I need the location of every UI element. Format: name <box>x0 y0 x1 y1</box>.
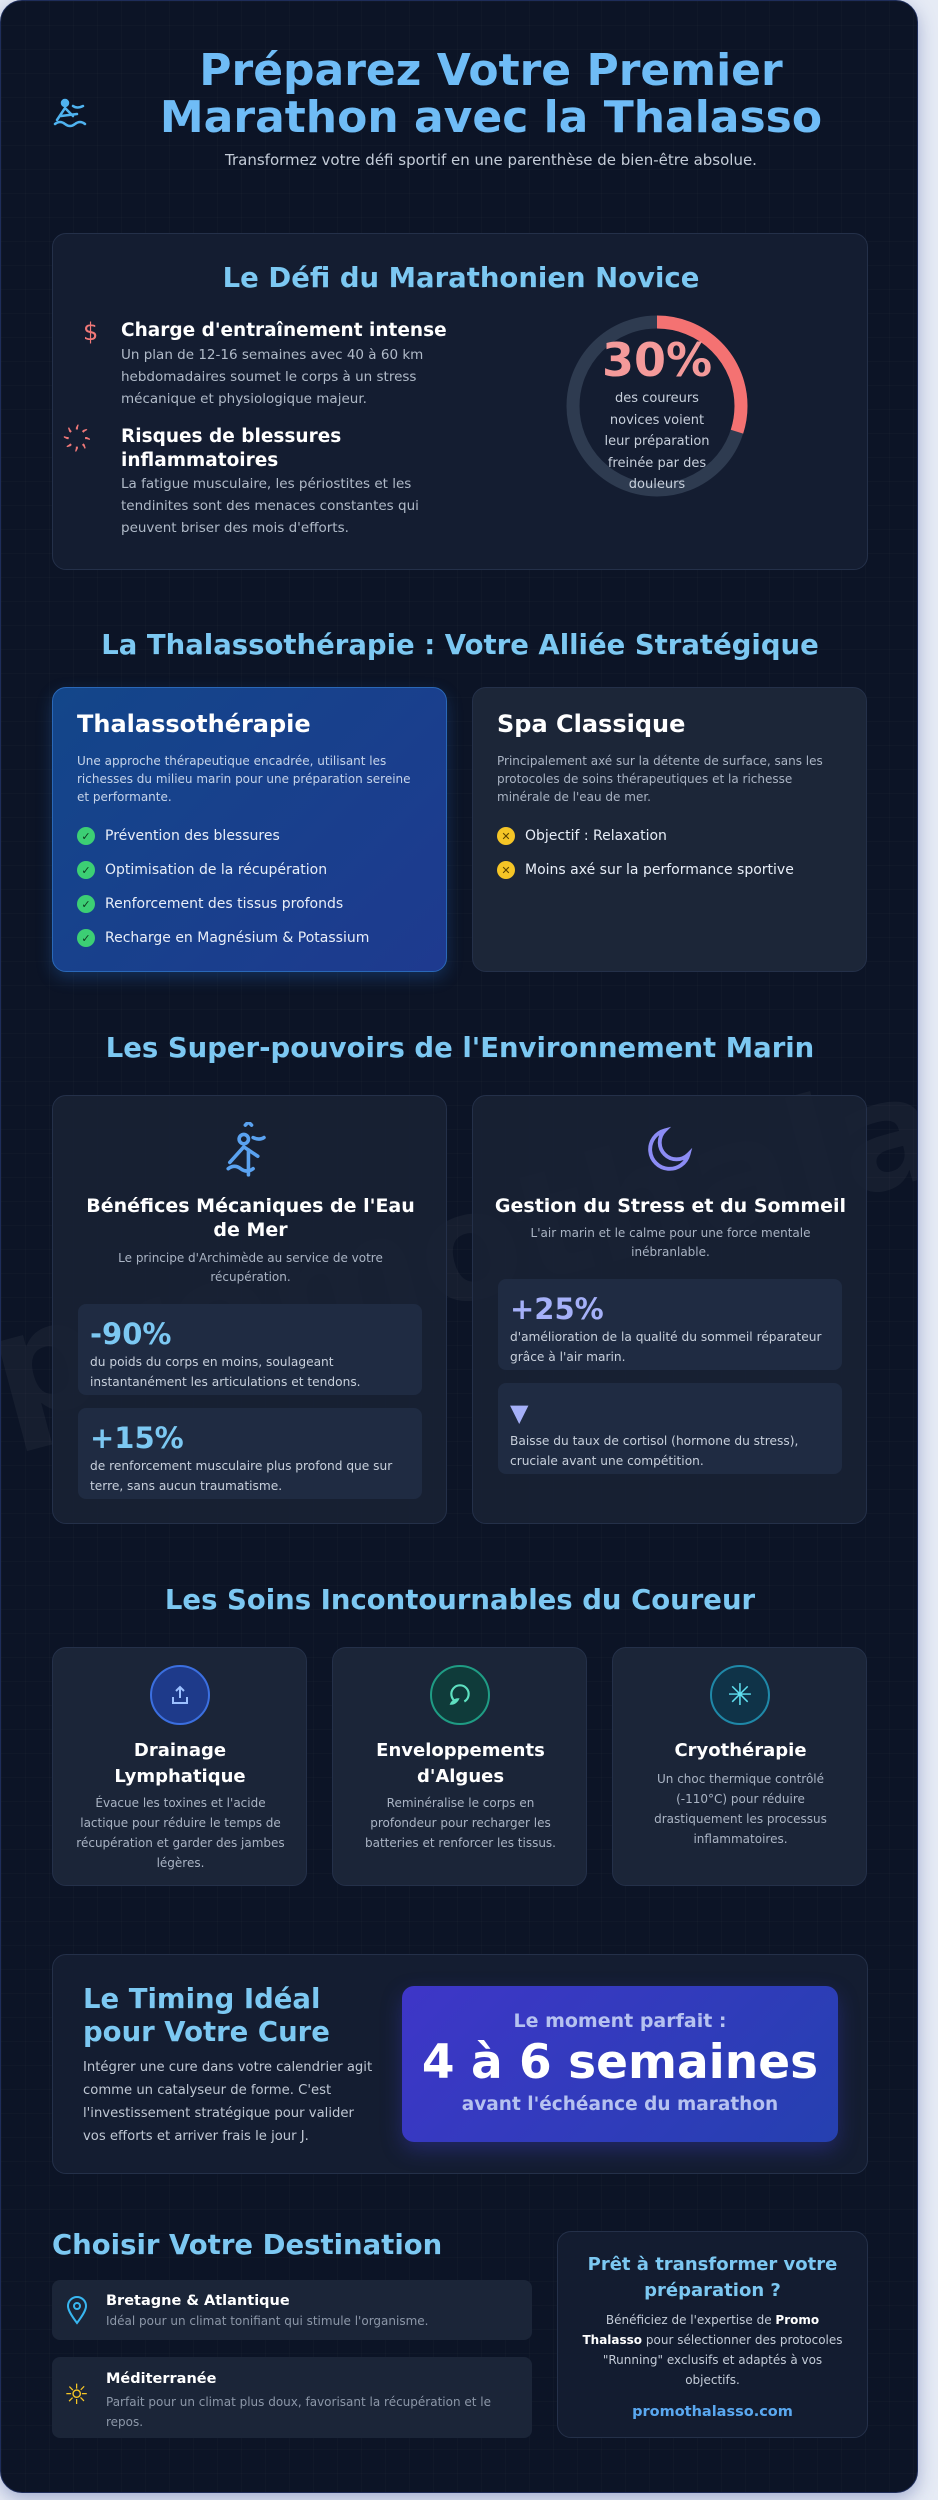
panel: stress: Gestion du Stress et du Sommeil <box>495 1195 846 1217</box>
panel: CTA <box>557 2231 868 2438</box>
checklist: ✓ <box>81 932 91 944</box>
x-list: ✕ <box>501 864 511 876</box>
item: risques: La fatigue musculaire, les périostites et les tendinites sont des menaces constantes qui peuvent briser des mois d'efforts. <box>121 476 419 536</box>
panel: timing: Le Timing Idéal pour Votre Cure <box>83 1983 330 2048</box>
item: risques: ҉ <box>83 427 91 451</box>
item: bretagne <box>52 2280 532 2340</box>
stat -90%: du poids du corps en moins, soulageant instantanément les articulations et tendons. <box>90 1355 361 1389</box>
item: charge: Charge d'entraînement intense <box>121 320 447 341</box>
stat -90%: -90% <box>90 1317 171 1351</box>
item: méditerranée: ☼ <box>64 2378 89 2411</box>
icon: upload <box>150 1665 210 1725</box>
stat +25%: +25% <box>510 1292 604 1326</box>
stat -90% <box>78 1304 422 1395</box>
icon: swimmer <box>226 1122 266 1177</box>
checklist: ✓ <box>81 864 91 876</box>
callout: 4 à 6 semaines: Le moment parfait : <box>513 2010 727 2032</box>
checklist: Recharge en Magnésium & Potassium <box>105 930 369 946</box>
checklist: ✓ <box>81 830 91 842</box>
panel: thalasso: Thalassothérapie <box>77 710 311 738</box>
panel: spa <box>472 687 867 972</box>
checklist: Prévention des blessures <box>105 828 280 844</box>
stat cortisol <box>498 1383 842 1474</box>
title: Marathon avec la Thalasso <box>160 92 822 143</box>
checklist <box>77 827 369 947</box>
panel: mécaniques <box>52 1095 447 1524</box>
item: méditerranée <box>52 2357 532 2438</box>
title: Préparez Votre Premier <box>199 45 783 96</box>
x-list <box>497 827 794 879</box>
item: risques: Risques de blessures inflammatoires <box>121 426 341 471</box>
callout: 4 à 6 semaines <box>402 1986 838 2142</box>
callout: 4 à 6 semaines: avant l'échéance du marathon <box>462 2094 778 2115</box>
heading: alliée: La Thalassothérapie : Votre Alliée Stratégique <box>101 629 819 661</box>
card: algues: Enveloppements d'Algues <box>376 1740 545 1787</box>
stat cortisol: ▼ <box>510 1399 528 1427</box>
panel: thalasso: Une approche thérapeutique encadrée, utilisant les richesses du milieu marin pour une préparation sereine et performante. <box>77 754 411 804</box>
card: drainage: Drainage Lymphatique <box>114 1740 246 1787</box>
x-list: Moins axé sur la performance sportive <box>525 862 794 878</box>
item: charge <box>83 318 447 407</box>
title <box>160 45 822 143</box>
item: charge: Un plan de 12-16 semaines avec 40 à 60 km hebdomadaires soumet le corps à un stress mécanique et physiologique majeur. <box>121 347 423 407</box>
panel: mécaniques: Bénéfices Mécaniques de l'Eau de Mer <box>86 1195 415 1241</box>
card: cryo: Cryothérapie <box>674 1740 807 1761</box>
item: risques <box>64 424 419 536</box>
item: méditerranée: Parfait pour un climat plus doux, favorisant la récupération et le repos. <box>106 2395 491 2429</box>
icon: snowflake: ✳ <box>727 1678 753 1712</box>
card: algues: Reminéralise le corps en profondeur pour recharger les batteries et renforcer les tissus. <box>365 1796 556 1850</box>
panel: spa: Principalement axé sur la détente de surface, sans les protocoles de soins thérapeutiques et la richesse minérale de l'eau de mer. <box>497 754 823 804</box>
x-list: Objectif : Relaxation <box>525 828 667 844</box>
panel: CTA: Prêt à transformer votre <box>588 2254 837 2275</box>
icon: snowflake <box>710 1665 770 1725</box>
donut chart 30%: 30% <box>602 333 712 387</box>
icon: moon <box>648 1126 692 1171</box>
panel: timing <box>52 1954 868 2174</box>
donut chart 30% <box>566 316 748 496</box>
heading: destination: Choisir Votre Destination <box>52 2229 442 2261</box>
icon: swimmer <box>54 98 86 128</box>
panel: CTA: promothalasso.com <box>632 2404 793 2420</box>
card: algues <box>332 1647 587 1886</box>
card: drainage <box>52 1647 307 1886</box>
item: charge: $ <box>83 318 98 346</box>
checklist: Optimisation de la récupération <box>105 862 327 878</box>
donut chart 30%: des coureurs novices voient leur préparation freinée par des douleurs <box>604 391 710 492</box>
item: bretagne: Idéal pour un climat tonifiant qui stimule l'organisme. <box>106 2314 428 2328</box>
item: bretagne: Bretagne & Atlantique <box>106 2293 290 2309</box>
callout: 4 à 6 semaines: 4 à 6 semaines <box>422 2035 818 2090</box>
panel: CTA: préparation ? <box>644 2280 781 2301</box>
checklist: Renforcement des tissus profonds <box>105 896 343 912</box>
stat +15% <box>78 1408 422 1499</box>
heading: super-pouvoirs: Les Super-pouvoirs de l'Environnement Marin <box>106 1032 814 1064</box>
stat +25% <box>498 1279 842 1370</box>
stat +25%: d'amélioration de la qualité du sommeil réparateur grâce à l'air marin. <box>510 1330 822 1364</box>
x-list: ✕ <box>501 830 511 842</box>
card: drainage: Évacue les toxines et l'acide lactique pour réduire le temps de récupération et garder des jambes légères. <box>76 1796 285 1870</box>
card: cryo <box>612 1647 867 1886</box>
panel: CTA: Bénéficiez de l'expertise de Promo Thalasso pour sélectionner des protocoles "Running" exclusifs et adaptés à vos objectifs. <box>582 2313 843 2387</box>
stat cortisol: Baisse du taux de cortisol (hormone du stress), cruciale avant une compétition. <box>510 1434 798 1468</box>
panel: défi <box>52 233 868 570</box>
checklist: ✓ <box>81 898 91 910</box>
panel: spa: Spa Classique <box>497 710 685 738</box>
panel: thalasso <box>52 687 447 972</box>
panel: timing: Intégrer une cure dans votre calendrier agit comme un catalyseur de forme. C'est l'investissement stratégique pour valider vos efforts et arriver frais le jour J. <box>83 2060 372 2144</box>
item: méditerranée: Méditerranée <box>106 2371 216 2387</box>
panel: stress: L'air marin et le calme pour une force mentale inébranlable. <box>531 1226 810 1259</box>
subtitle: Transformez votre défi sportif en une parenthèse de bien-être absolue. <box>225 151 757 169</box>
panel: stress <box>472 1095 867 1524</box>
panel: mécaniques: Le principe d'Archimède au service de votre récupération. <box>118 1251 383 1284</box>
card: cryo: Un choc thermique contrôlé (-110°C) pour réduire drastiquement les processus inflammatoires. <box>654 1772 827 1846</box>
stat +15%: +15% <box>90 1421 184 1455</box>
heading: soins: Les Soins Incontournables du Coureur <box>165 1584 755 1616</box>
stat +15%: de renforcement musculaire plus profond que sur terre, sans aucun traumatisme. <box>90 1459 392 1493</box>
icon: leaf <box>430 1665 490 1725</box>
heading: Le Défi du Marathonien Novice <box>223 262 699 294</box>
